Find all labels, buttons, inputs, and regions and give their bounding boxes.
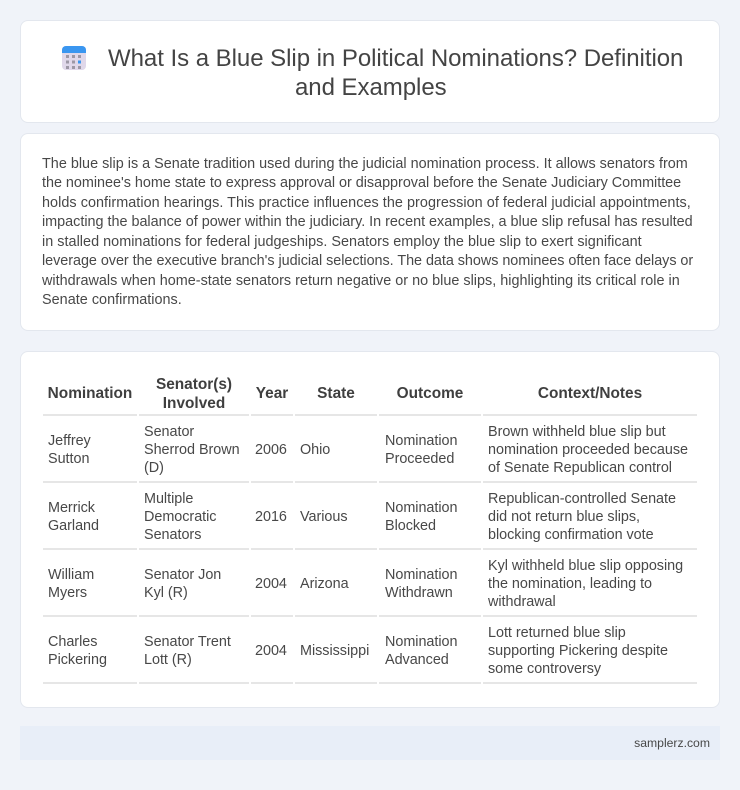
text block: description: withdrawals when home-state senators return negative or no blue slips, highlighting its critical role in bbox=[42, 272, 680, 288]
text block: description: in stalled nominations for federal judgeships. Senators employ the blue slip to exert significant bbox=[42, 234, 642, 250]
text: Ohio bbox=[300, 442, 330, 458]
text block: description: The blue slip is a Senate tradition used during the judicial nomination process. It allows senators from bbox=[42, 156, 688, 172]
panel: table card bbox=[20, 351, 720, 708]
text: 2006 bbox=[255, 442, 287, 458]
text: Kyl (R) bbox=[144, 585, 188, 601]
text: Nomination bbox=[385, 500, 458, 516]
text: Merrick bbox=[48, 500, 95, 516]
text: Senator Trent bbox=[144, 634, 231, 650]
text: Republican-controlled Senate bbox=[488, 491, 676, 507]
text: Nomination bbox=[385, 433, 458, 449]
icon: calendar bbox=[62, 46, 86, 70]
text: (D) bbox=[144, 460, 164, 476]
text: supporting Pickering despite bbox=[488, 643, 668, 659]
footer bar bbox=[20, 726, 720, 760]
text: Withdrawn bbox=[385, 585, 453, 601]
text: Charles bbox=[48, 634, 97, 650]
text: 2016 bbox=[255, 509, 287, 525]
text block: description: leverage over the executive branch's judicial selections. The data shows nominees often face delays or bbox=[42, 253, 693, 269]
text: Lott (R) bbox=[144, 652, 192, 668]
text: Democratic bbox=[144, 509, 216, 525]
text: Involved bbox=[163, 394, 225, 412]
text: Advanced bbox=[385, 652, 449, 668]
text block: description: Senate confirmations. bbox=[42, 292, 182, 308]
text: Arizona bbox=[300, 576, 349, 592]
panel: title card: What Is a Blue Slip in Political Nominations? Definition bbox=[108, 45, 683, 72]
text: Senator(s) bbox=[156, 376, 232, 393]
text: Sutton bbox=[48, 451, 89, 467]
row: Merrick Garland bbox=[43, 491, 697, 550]
text: Year bbox=[256, 385, 288, 402]
text: Nomination bbox=[385, 567, 458, 583]
row: Jeffrey Sutton bbox=[43, 424, 697, 483]
text: Sherrod Brown bbox=[144, 442, 240, 458]
text: nomination proceeded because bbox=[488, 442, 688, 458]
text: State bbox=[317, 385, 355, 402]
text: Senators bbox=[144, 527, 201, 543]
text: Brown withheld blue slip but bbox=[488, 424, 666, 440]
text: the nomination, leading to bbox=[488, 576, 652, 592]
text: some controversy bbox=[488, 661, 601, 677]
text block: description bbox=[42, 156, 693, 308]
text: 2004 bbox=[255, 576, 287, 592]
text: Outcome bbox=[397, 385, 463, 402]
text: Nomination bbox=[385, 634, 458, 650]
text: Pickering bbox=[48, 652, 107, 668]
text: William bbox=[48, 567, 94, 583]
text block: description: the nominee's home state to express approval or disapproval before the Senate Judiciary Committee bbox=[42, 175, 681, 191]
text: did not return blue slips, bbox=[488, 509, 640, 525]
text: Proceeded bbox=[385, 451, 454, 467]
panel: title card bbox=[20, 20, 720, 123]
text: Mississippi bbox=[300, 643, 369, 659]
text: Multiple bbox=[144, 491, 193, 507]
text: Nomination bbox=[48, 385, 132, 402]
text: Senator bbox=[144, 424, 194, 440]
text: Garland bbox=[48, 518, 99, 534]
text: Blocked bbox=[385, 518, 436, 534]
panel: title card: and Examples bbox=[295, 74, 447, 101]
text: Context/Notes bbox=[538, 385, 642, 402]
text: Kyl withheld blue slip opposing bbox=[488, 558, 683, 574]
text: Jeffrey bbox=[48, 433, 91, 449]
table bbox=[43, 376, 697, 684]
row: William Myers bbox=[43, 558, 697, 617]
text: Various bbox=[300, 509, 348, 525]
text block: description: impacting the balance of power within the judiciary. In recent examples, a blue slip refusal has resulted bbox=[42, 214, 693, 230]
table header bbox=[43, 376, 697, 416]
text: blocking confirmation vote bbox=[488, 527, 654, 543]
text block: description: holds confirmation hearings. This practice influences the progression of federal judicial appointments, bbox=[42, 194, 691, 210]
text: 2004 bbox=[255, 643, 287, 659]
panel: description bbox=[20, 133, 720, 331]
text: of Senate Republican control bbox=[488, 460, 672, 476]
footer text: samplerz.com bbox=[634, 736, 710, 750]
text: Senator Jon bbox=[144, 567, 221, 583]
text: Myers bbox=[48, 585, 87, 601]
title bbox=[108, 45, 683, 101]
text: withdrawal bbox=[488, 594, 556, 610]
text: Lott returned blue slip bbox=[488, 625, 626, 641]
row: Charles Pickering bbox=[43, 625, 697, 684]
